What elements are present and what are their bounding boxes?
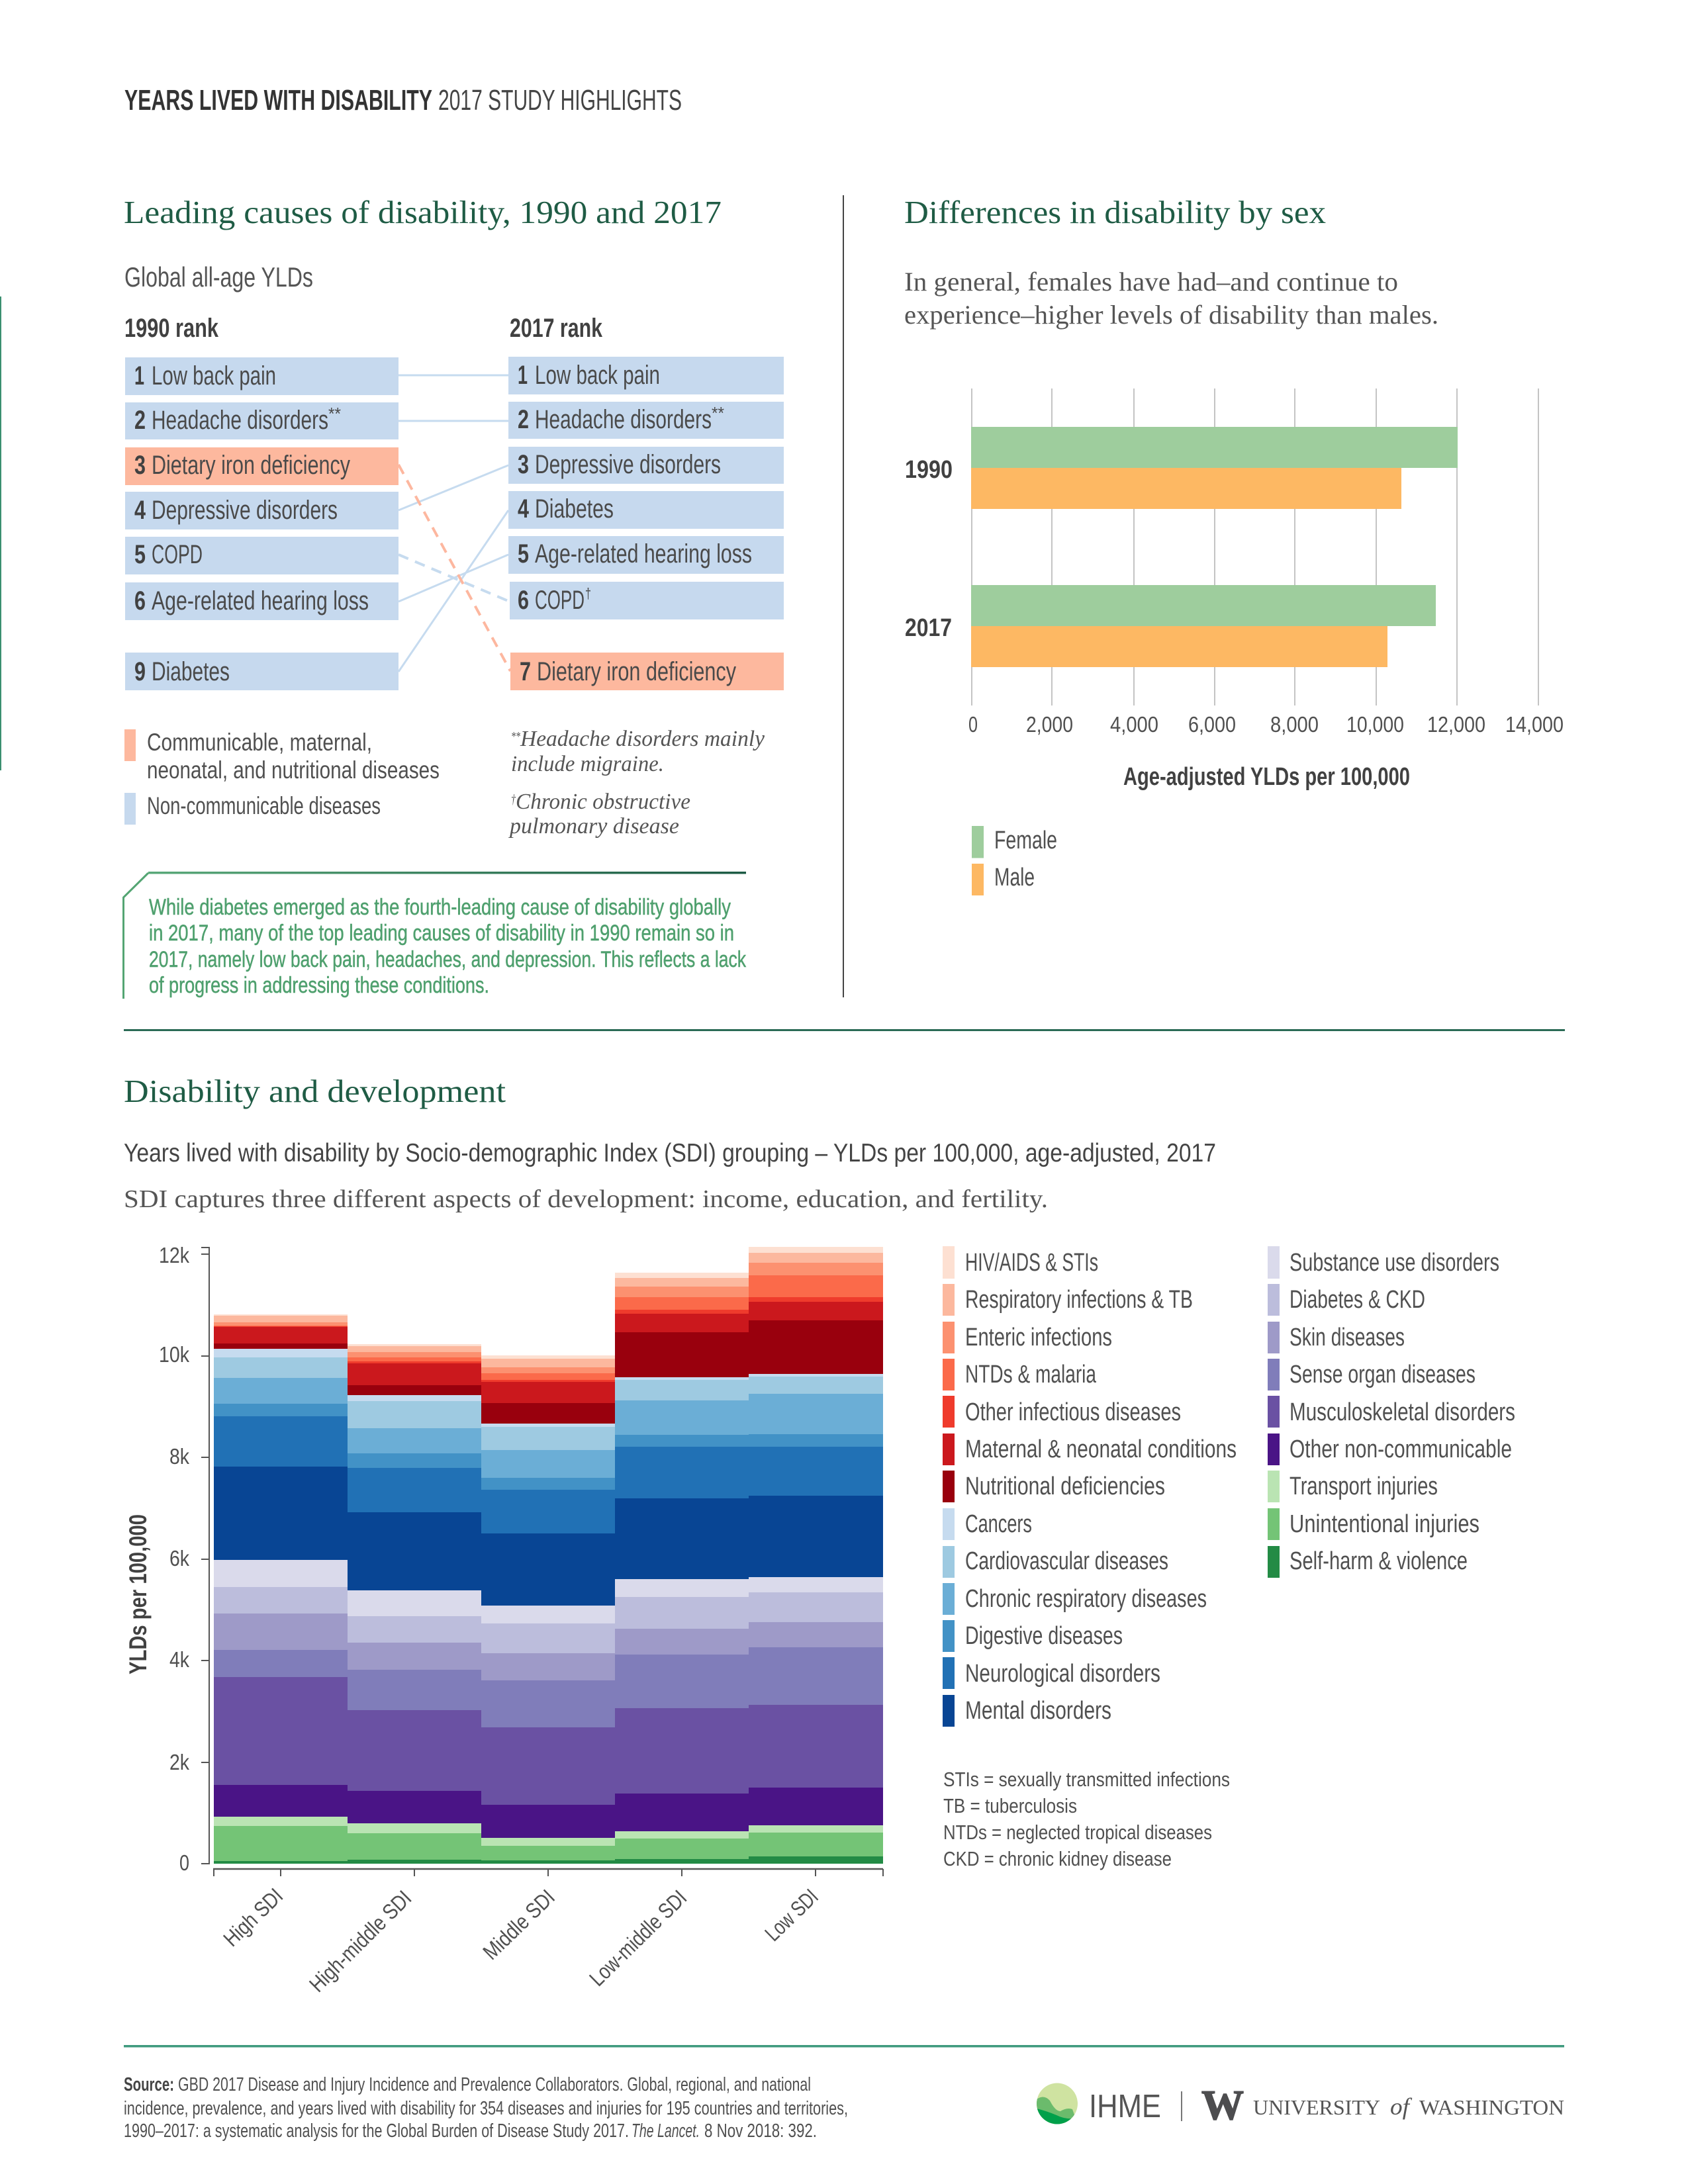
connectors between rank columns: [399, 375, 510, 672]
2017 rank list: Headache disorders: [535, 405, 712, 434]
y axis: 6k: [169, 1546, 189, 1570]
panel: leading causes of disability: [123, 194, 784, 999]
heading: leading causes: Leading causes of disability, 1990 and 2017: [124, 194, 722, 230]
source citation: [124, 2074, 848, 2142]
bar chart: YLDs by sex: 2017: [905, 614, 952, 642]
legend: causes column 2: Transport injuries: [1289, 1473, 1438, 1500]
x axis: Low-middle SDI: [585, 1885, 691, 1991]
2017 rank list: 4: [518, 494, 530, 523]
legend: causes column 1: Chronic respiratory diseases: [965, 1585, 1207, 1613]
callout: of progress in addressing these conditions.: [149, 973, 489, 998]
1990 rank list: Depressive disorders: [152, 496, 338, 525]
2017 rank list: Dietary iron deficiency: [537, 657, 736, 686]
footnotes: †: [511, 792, 516, 807]
legend: causes column 2: [1268, 1246, 1515, 1578]
legend: causes column 1: Maternal & neonatal conditions: [965, 1435, 1237, 1463]
legend: causes column 1: Cancers: [965, 1510, 1032, 1538]
legend: causes column 1: Enteric infections: [965, 1324, 1112, 1351]
1990 rank list: Headache disorders: [152, 406, 328, 435]
x axis labels: 4,000: [1110, 712, 1158, 737]
x axis labels: 12,000: [1427, 712, 1485, 737]
title: 2017 STUDY HIGHLIGHTS: [438, 84, 682, 116]
2017 rank list: 5: [518, 539, 529, 569]
footnotes: include migraine.: [511, 752, 664, 776]
legend: causes column 2: Substance use disorders: [1289, 1249, 1499, 1277]
bars: 2017: [971, 585, 1436, 667]
2017 rank list: [508, 357, 784, 690]
x axis labels: 2,000: [1026, 712, 1073, 737]
logo: University of Washington: W: [1201, 2081, 1244, 2128]
text block: sex difference summary: [904, 267, 1438, 330]
subheading: chart description: Years lived with disability by Socio-demographic Index (SDI) grouping – YLDs per 100,000, age-adjusted, 2017: [124, 1139, 1216, 1167]
y axis: 0: [179, 1850, 189, 1875]
legend: causes column 1: Digestive diseases: [965, 1622, 1123, 1650]
source citation: incidence, prevalence, and years lived with disability for 354 diseases and injuries for 195 countries and territories,: [124, 2098, 848, 2119]
y axis: 4k: [169, 1647, 189, 1672]
legend: disease category: neonatal, and nutritional diseases: [147, 756, 440, 784]
legend: causes column 2: Other non-communicable: [1289, 1435, 1512, 1463]
heading: differences by sex: Differences in disability by sex: [904, 194, 1326, 230]
text block: sex difference summary: In general, females have had–and continue to: [904, 267, 1398, 296]
2017 rank list: Depressive disorders: [535, 450, 721, 479]
logo: IHME: IHME: [1089, 2089, 1161, 2124]
1990 rank list: 1: [134, 361, 144, 390]
legend: causes column 2: Diabetes & CKD: [1289, 1286, 1425, 1314]
legend: disease category: Communicable, maternal,: [147, 729, 372, 756]
2017 rank list: Low back pain: [535, 361, 660, 390]
legend: causes column 1: Respiratory infections & TB: [965, 1286, 1193, 1314]
2017 rank list: 2: [518, 405, 529, 434]
legend: causes column 1: Cardiovascular diseases: [965, 1547, 1168, 1575]
footnotes: pulmonary disease: [508, 814, 679, 839]
text block: SDI definition: SDI captures three different aspects of development: income, education, and fertility.: [124, 1185, 1048, 1213]
y axis title: YLDs per 100,000: [124, 1514, 152, 1674]
source citation: 8 Nov 2018: 392.: [704, 2120, 817, 2142]
callout: While diabetes emerged as the fourth-leading cause of disability globally: [149, 895, 731, 920]
x axis: High SDI: [218, 1884, 287, 1951]
abbreviations key: NTDs = neglected tropical diseases: [943, 1821, 1212, 1844]
source citation: The Lancet.: [632, 2120, 700, 2142]
x axis: [213, 1869, 883, 1997]
1990 rank list: **: [328, 404, 341, 424]
abbreviations key: STIs = sexually transmitted infections: [943, 1768, 1230, 1791]
subheading: global all-age YLDs: Global all-age YLDs: [124, 261, 313, 293]
y axis: 12k: [159, 1243, 189, 1267]
x axis labels: 14,000: [1505, 712, 1564, 737]
1990 rank list: 6: [134, 586, 146, 615]
abbreviations key: TB = tuberculosis: [943, 1794, 1077, 1817]
1990 rank list: 2: [134, 406, 146, 435]
1990 rank list: [125, 357, 399, 690]
2017 rank list: 1: [518, 361, 528, 390]
bar chart: YLDs by sex: [905, 388, 1564, 791]
1990 rank list: Diabetes: [152, 657, 230, 686]
legend: causes column 2: Musculoskeletal disorders: [1289, 1398, 1515, 1426]
legend: causes column 1: Nutritional deficiencies: [965, 1473, 1165, 1500]
logo: University of Washington: of: [1390, 2093, 1413, 2120]
y axis: 8k: [169, 1444, 189, 1469]
legend: disease category: [124, 729, 440, 825]
legend: causes column 1: Neurological disorders: [965, 1660, 1160, 1688]
stacked step chart: [214, 1247, 883, 1864]
y axis: [159, 1243, 209, 1875]
legend: sex: Female: [994, 827, 1057, 854]
2017 rank list: Age-related hearing loss: [535, 539, 752, 569]
logo: University of Washington: [1201, 2081, 1564, 2128]
x axis labels: 10,000: [1346, 712, 1404, 737]
logo: University of Washington: WASHINGTON: [1419, 2095, 1564, 2119]
legend: causes column 1: Other infectious diseases: [965, 1398, 1181, 1426]
source citation: GBD 2017 Disease and Injury Incidence and Prevalence Collaborators. Global, regional, and national: [178, 2074, 811, 2095]
footnotes: Chronic obstructive: [516, 790, 690, 814]
footnotes: [508, 727, 765, 839]
x axis labels: 0: [968, 712, 978, 737]
abbreviations key: CKD = chronic kidney disease: [943, 1847, 1172, 1870]
2017 rank list: 7: [520, 657, 531, 686]
legend: causes column 1: Mental disorders: [965, 1697, 1111, 1725]
1990 rank list: 9: [134, 657, 146, 686]
2017 rank list: 6: [518, 586, 529, 615]
y axis: 2k: [169, 1750, 189, 1774]
x axis: High-middle SDI: [305, 1886, 416, 1997]
legend: causes column 1: NTDs & malaria: [965, 1361, 1097, 1388]
1990 rank list: 4: [134, 496, 146, 525]
2017 rank list: †: [585, 585, 591, 602]
footnotes: Headache disorders mainly: [520, 727, 765, 751]
panel: disability and development: [124, 1073, 1515, 1997]
column heading: 2017 rank: 2017 rank: [510, 314, 603, 343]
x axis: Middle SDI: [478, 1885, 559, 1964]
2017 rank list: COPD: [535, 586, 585, 615]
bar chart: YLDs by sex: 1990: [905, 456, 953, 484]
heading: disability and development: Disability and development: [124, 1073, 506, 1109]
2017 rank list: 3: [518, 450, 529, 479]
1990 rank list: 5: [134, 540, 146, 569]
callout: 2017, namely low back pain, headaches, and depression. This reflects a lack: [149, 947, 747, 972]
source citation: Source:: [124, 2074, 174, 2095]
abbreviations key: [943, 1768, 1230, 1870]
footnotes: **: [511, 729, 520, 744]
x axis: Low SDI: [760, 1884, 823, 1946]
legend: causes column 2: Self-harm & violence: [1289, 1547, 1468, 1575]
legend: sex: [972, 826, 1057, 895]
callout: in 2017, many of the top leading causes of disability in 1990 remain so in: [149, 921, 734, 946]
1990 rank list: Dietary iron deficiency: [152, 451, 350, 480]
legend: causes column 1: HIV/AIDS & STIs: [965, 1249, 1098, 1277]
text block: sex difference summary: experience–higher levels of disability than males.: [904, 300, 1438, 330]
logo: University of Washington: UNIVERSITY: [1253, 2095, 1380, 2119]
legend: causes column 2: Skin diseases: [1289, 1324, 1405, 1351]
panel: differences by sex: [904, 194, 1564, 895]
title: YEARS LIVED WITH DISABILITY: [124, 84, 432, 116]
1990 rank list: Low back pain: [152, 361, 276, 390]
1990 rank list: 3: [134, 451, 146, 480]
x axis labels: [968, 712, 1564, 737]
legend: causes column 2: Unintentional injuries: [1289, 1510, 1479, 1538]
y axis: 10k: [159, 1342, 189, 1367]
x axis labels: 6,000: [1188, 712, 1236, 737]
legend: disease category: Non-communicable diseases: [147, 792, 381, 819]
callout: [123, 872, 747, 999]
bars: 1990: [971, 427, 1458, 509]
1990 rank list: Age-related hearing loss: [152, 586, 369, 615]
legend: causes column 2: Sense organ diseases: [1289, 1361, 1476, 1388]
2017 rank list: Diabetes: [535, 494, 614, 523]
1990 rank list: COPD: [152, 540, 203, 569]
legend: causes column 1: [943, 1246, 1237, 1727]
source citation: 1990–2017: a systematic analysis for the Global Burden of Disease Study 2017.: [124, 2120, 629, 2142]
2017 rank list: **: [712, 403, 724, 423]
x axis labels: 8,000: [1270, 712, 1319, 737]
axis title: Age-adjusted YLDs per 100,000: [1123, 763, 1410, 791]
legend: sex: Male: [994, 864, 1035, 891]
logo: IHME: [1037, 2083, 1161, 2128]
column heading: 1990 rank: 1990 rank: [124, 314, 219, 343]
